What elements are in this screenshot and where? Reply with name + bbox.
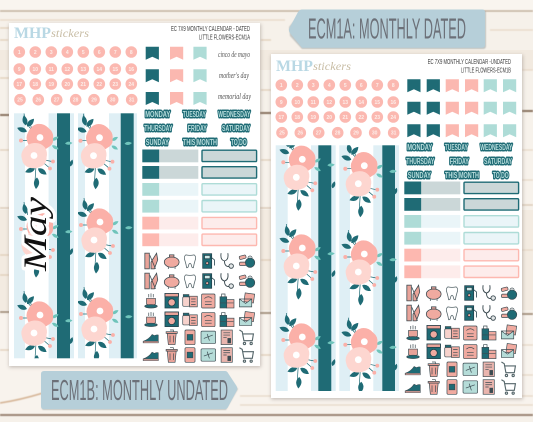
date number circles: 22: [359, 115, 364, 121]
day of week labels: THURSDAY: [144, 124, 173, 133]
date number circles: 26: [36, 98, 41, 104]
text: ECM1B: MONTHLY UNDATED: [51, 375, 228, 407]
date number circles: 27: [54, 98, 60, 104]
sheet: undated: [271, 54, 523, 400]
logo: [14, 25, 90, 42]
date number circles: 5: [82, 50, 85, 56]
day of week labels: TO DO: [231, 138, 247, 147]
date number circles: 15: [113, 67, 118, 73]
day of week labels: FRIDAY: [450, 157, 469, 166]
floral strip two: [339, 142, 399, 393]
date number circles: 3: [50, 50, 53, 56]
day of week labels: THURSDAY: [406, 157, 435, 166]
logo: stickers: [51, 28, 90, 40]
header bars and boxes: [142, 150, 257, 246]
date number circles: 14: [359, 100, 364, 106]
date number circles: 12: [327, 100, 332, 106]
logo: stickers: [313, 61, 352, 73]
date number circles: 25: [279, 131, 285, 137]
date number circles: 20: [65, 82, 70, 88]
date number circles: 24: [129, 82, 134, 88]
floral strip two: [76, 113, 137, 363]
header bars and boxes: [404, 182, 519, 278]
date number circles: 2: [296, 83, 299, 89]
date number circles: 9: [18, 67, 21, 73]
date number circles: 14: [97, 67, 102, 73]
date number circles: 30: [110, 98, 116, 104]
day of week labels: THIS MONTH: [183, 138, 217, 147]
date number circles: 18: [295, 115, 300, 121]
date number circles: 18: [33, 82, 38, 88]
date number circles: 15: [375, 100, 380, 106]
date number circles: 28: [73, 98, 79, 104]
date number circles: 6: [98, 50, 101, 56]
month name script: May: May: [18, 197, 54, 272]
date number circles: 23: [375, 115, 380, 121]
date number circles: 19: [49, 82, 54, 88]
holiday script labels: cinco de mayo: [218, 50, 250, 59]
day of week labels: WEDNESDAY: [218, 110, 251, 119]
date number circles: 22: [97, 82, 102, 88]
floral strip one: [276, 135, 336, 391]
holiday script labels: mother's day: [219, 71, 249, 80]
date number circles: [13, 46, 137, 105]
date number circles: 28: [335, 131, 341, 137]
logo: MHP: [276, 58, 314, 75]
holiday script labels: memorial day: [218, 92, 251, 101]
date number circles: 3: [312, 83, 315, 89]
day of week labels: SATURDAY: [222, 124, 250, 133]
date number circles: 9: [280, 100, 283, 106]
sheet title: [171, 24, 250, 42]
day of week labels: TO DO: [493, 171, 509, 180]
date number circles: 19: [311, 115, 316, 121]
day of week labels: MONDAY: [407, 143, 433, 152]
logo: [276, 58, 352, 75]
date number circles: 11: [311, 100, 316, 106]
date number circles: 8: [392, 83, 395, 89]
date number circles: 10: [295, 100, 300, 106]
date number circles: 4: [66, 50, 69, 56]
date number circles: 6: [360, 83, 363, 89]
sheet title: EC 7X9 MONTHLY CALENDAR - DATED: [171, 24, 250, 33]
date number circles: 13: [343, 100, 348, 106]
day of week labels: WEDNESDAY: [480, 143, 513, 152]
date number circles: 7: [376, 83, 379, 89]
date number circles: 21: [81, 82, 86, 88]
date number circles: 7: [114, 50, 117, 56]
date number circles: 16: [129, 67, 134, 73]
day of week labels: FRIDAY: [188, 124, 207, 133]
holiday script labels: [218, 50, 251, 101]
day of week labels: THIS MONTH: [445, 171, 479, 180]
date number circles: 17: [17, 82, 22, 88]
date number circles: 13: [81, 67, 86, 73]
date number circles: 29: [353, 131, 359, 137]
banner: ECM1A monthly dated: [289, 10, 486, 49]
date number circles: 8: [130, 50, 133, 56]
date number circles: 17: [279, 115, 284, 121]
banner: ECM1B monthly undated: [41, 371, 238, 410]
day of week labels: TUESDAY: [445, 143, 468, 152]
date number circles: 29: [91, 98, 97, 104]
date number circles: 10: [33, 67, 38, 73]
date number circles: 16: [391, 100, 396, 106]
logo: MHP: [14, 25, 52, 42]
icon stickers: [405, 285, 517, 394]
icon stickers: [143, 253, 255, 362]
day of week labels: SUNDAY: [146, 138, 169, 147]
sheet title: LITTLE FLOWERS-ECM1A: [199, 32, 250, 42]
date number circles: 26: [298, 131, 303, 137]
date number circles: 31: [129, 98, 135, 104]
date number circles: 4: [328, 83, 331, 89]
date number circles: 31: [391, 131, 397, 137]
day of week labels: [144, 110, 251, 147]
date number circles: 2: [34, 50, 37, 56]
date number circles: 12: [65, 67, 70, 73]
sheet: dated: [9, 23, 261, 368]
floral strip one: [14, 113, 74, 367]
date number circles: 24: [391, 115, 396, 121]
date number circles: 11: [49, 67, 54, 73]
flag stickers: [146, 47, 207, 105]
date number circles: 20: [327, 115, 332, 121]
date number circles: 1: [18, 50, 21, 56]
date number circles: 30: [372, 131, 378, 137]
date number circles: 5: [344, 83, 347, 89]
date number circles: 23: [113, 82, 118, 88]
day of week labels: [406, 143, 513, 180]
day of week labels: SUNDAY: [408, 171, 431, 180]
sheet title: [428, 57, 511, 74]
date number circles: 1: [280, 83, 283, 89]
day of week labels: SATURDAY: [484, 157, 512, 166]
date number circles: 21: [343, 115, 348, 121]
flag stickers: [407, 79, 516, 137]
day of week labels: TUESDAY: [183, 110, 206, 119]
date number circles: 27: [316, 131, 322, 137]
date number circles: [276, 79, 400, 138]
date number circles: 25: [17, 98, 23, 104]
day of week labels: MONDAY: [145, 110, 171, 119]
